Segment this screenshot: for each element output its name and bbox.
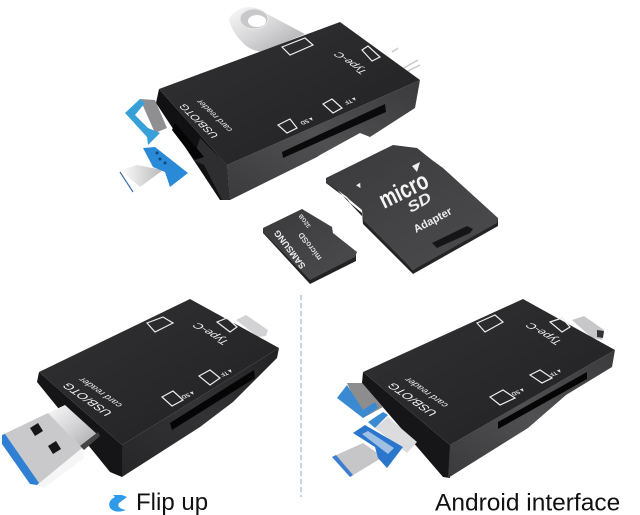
- device: Android interface state: [332, 299, 615, 478]
- SD label: ▲SD: [179, 390, 197, 399]
- card slot: [282, 104, 386, 158]
- reader front face: [227, 80, 420, 200]
- card reader label: card reader: [76, 376, 126, 408]
- adapter markers: ▼: [354, 180, 365, 192]
- Adapter label: Adapter: [412, 205, 455, 236]
- swivel metal ring: [229, 7, 305, 52]
- icon: flip up arrow: [109, 495, 127, 512]
- reader top face: [363, 299, 615, 445]
- reader front face: [122, 348, 279, 477]
- reader top face: [39, 299, 279, 445]
- Type-C plug: [236, 315, 268, 337]
- device: flip-up USB state: [2, 299, 279, 488]
- card reader label: card reader: [402, 376, 452, 408]
- TF label: ▲TF: [547, 368, 564, 377]
- TF label: ▲TF: [342, 96, 359, 105]
- card reader label: card reader: [193, 99, 235, 133]
- SD label: ▲SD: [509, 387, 527, 396]
- reader top face: [159, 22, 420, 165]
- port icons: [477, 315, 570, 405]
- dashed divider: [300, 295, 302, 497]
- reader left face: [362, 372, 450, 478]
- micro logo: micro: [374, 166, 433, 214]
- reader front face: [448, 350, 615, 478]
- Type-C plug pins: [392, 48, 420, 72]
- device: top card reader with swivel ring: [120, 7, 420, 200]
- Samsung microSD card: [263, 209, 357, 284]
- USB/OTG label: USB/OTG: [59, 381, 116, 418]
- SD adapter card: [326, 145, 498, 274]
- Type-C label: Type-C: [523, 321, 566, 346]
- port icons: [147, 317, 237, 406]
- OTG connectors: [120, 99, 188, 192]
- reader left face: [37, 372, 122, 477]
- end port slot: [172, 123, 204, 160]
- Type-C label: Type-C: [190, 321, 233, 346]
- USB-A plug: [2, 405, 100, 488]
- microSD label: microSD: [296, 230, 324, 262]
- card slot: [498, 372, 587, 429]
- USB/OTG label: USB/OTG: [177, 102, 222, 139]
- SD logo: SD: [404, 189, 434, 216]
- card slot: [170, 370, 255, 430]
- reader left face: [156, 89, 230, 200]
- capacity label: 32GB: [298, 212, 313, 228]
- adapter notch: [432, 226, 473, 248]
- SAMSUNG label: SAMSUNG: [272, 228, 308, 271]
- TF label: ▲TF: [218, 368, 235, 377]
- SD label: ▲SD: [298, 116, 316, 125]
- port icons: [278, 38, 380, 133]
- Type-C label: Type-C: [331, 50, 371, 75]
- Type-C plug: [572, 316, 604, 340]
- OTG connectors: [332, 383, 417, 477]
- USB/OTG label: USB/OTG: [384, 381, 441, 418]
